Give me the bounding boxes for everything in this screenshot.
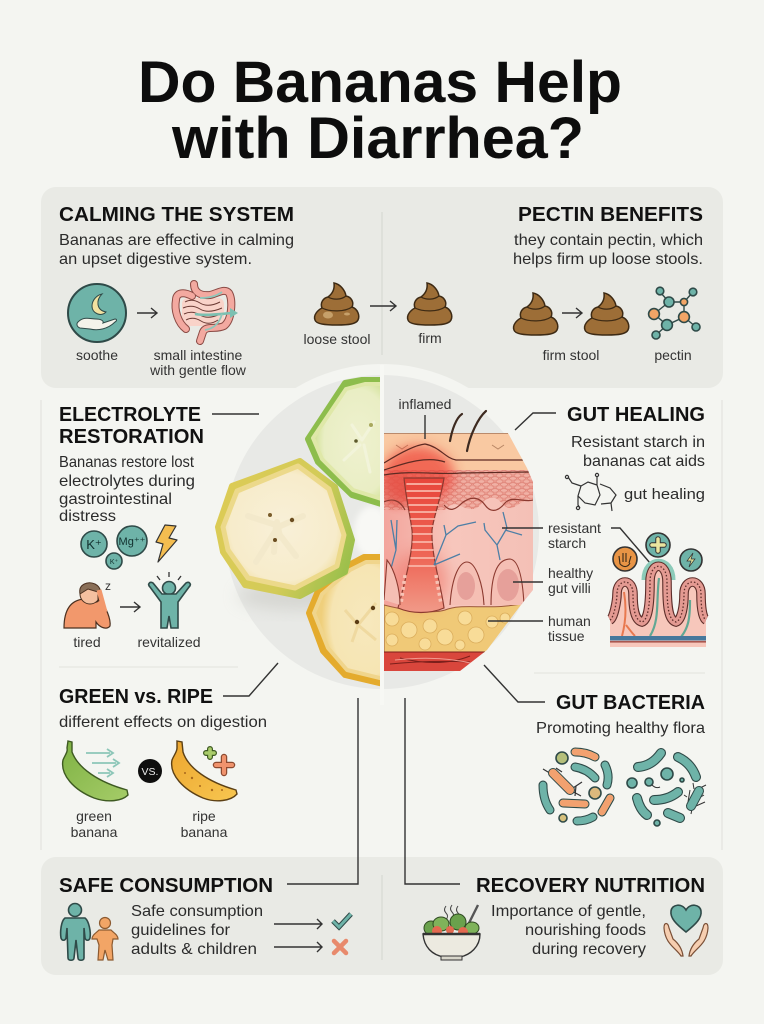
label: firm: firm xyxy=(418,330,442,346)
icon: pectin molecule xyxy=(649,287,700,339)
text: pectin description: they contain pectin, which xyxy=(514,232,703,249)
leader line xyxy=(405,698,460,884)
tissue layer: skin xyxy=(384,433,536,473)
labels: tissue parts: healthy xyxy=(548,565,593,581)
tissue layer: fat xyxy=(384,602,530,652)
tissue folds xyxy=(384,498,533,510)
icon: check mark xyxy=(333,914,351,927)
text: electrolyte description xyxy=(59,454,195,525)
label: ripe banana: ripe xyxy=(192,808,216,824)
heading: calming the system: CALMING THE SYSTEM xyxy=(59,203,294,226)
labels: tissue parts: resistant xyxy=(548,520,601,536)
leader line xyxy=(515,413,556,430)
icon: loose stool xyxy=(315,283,359,325)
banana slice: green xyxy=(308,380,388,506)
text: gut healing description: bananas cat aids xyxy=(583,453,705,470)
inflamed glow xyxy=(382,446,454,506)
label: tired: tired xyxy=(73,634,101,650)
label: firm stool: firm stool xyxy=(543,347,599,363)
icon: tired person xyxy=(64,579,111,628)
central circle: banana versus gut tissue xyxy=(214,364,550,705)
banana slices xyxy=(218,380,390,685)
label: green banana: green xyxy=(76,808,112,824)
icon: heart in hands xyxy=(664,905,708,956)
section: pectin benefits xyxy=(513,203,703,363)
icon: bacteria left cluster xyxy=(543,752,610,822)
labels: tissue parts xyxy=(548,520,601,644)
text: calming description: an upset digestive system. xyxy=(59,251,252,268)
label: green banana xyxy=(71,808,118,840)
tissue layer: dermis xyxy=(384,495,536,620)
arrow: to cross xyxy=(274,942,322,952)
text: pectin description xyxy=(513,232,703,268)
label: soothe: soothe xyxy=(76,347,118,363)
section: gut healing xyxy=(488,403,706,647)
text: electrolyte description: gastrointestinal xyxy=(59,491,172,508)
text: recovery nutrition description: Importance of gentle, xyxy=(491,903,646,920)
icon: starch molecule xyxy=(565,473,616,511)
heading: gut healing: GUT HEALING xyxy=(567,403,705,426)
label: ripe banana xyxy=(181,808,228,840)
blood vessels xyxy=(390,512,522,572)
leader lines: tissue parts xyxy=(488,528,543,621)
labels: tissue parts: tissue xyxy=(548,628,585,644)
icon: electrolyte ions xyxy=(81,525,177,569)
inflamed column xyxy=(398,478,444,612)
heading: pectin benefits: PECTIN BENEFITS xyxy=(518,203,703,226)
arrow: tired to revitalized xyxy=(120,602,140,612)
labels: tissue parts: gut villi xyxy=(548,580,591,596)
tissue layer: red cell layer xyxy=(384,470,536,510)
icon: tired person: z xyxy=(105,579,111,593)
label: inflamed: inflamed xyxy=(399,396,451,412)
icon: versus badge xyxy=(138,759,162,783)
leader line xyxy=(223,663,278,696)
leader line xyxy=(287,698,358,884)
label: ripe banana: banana xyxy=(181,824,228,840)
icon: firm stool xyxy=(408,283,452,325)
icon: bacteria right cluster xyxy=(627,753,706,826)
title xyxy=(138,50,622,171)
tissue layer: muscle xyxy=(384,652,484,671)
section: green vs ripe xyxy=(59,663,278,840)
section: loose to firm stool xyxy=(304,283,452,347)
hair strands xyxy=(450,411,486,451)
icon: small intestine xyxy=(175,284,238,341)
icon: electrolyte ions: K⁺ xyxy=(86,537,102,552)
label: small intestine: with gentle flow xyxy=(149,362,247,378)
icon: salad bowl xyxy=(423,905,480,960)
labels: tissue parts: human xyxy=(548,613,591,629)
text: pectin description: helps firm up loose stools. xyxy=(513,251,703,268)
heading: green vs ripe: GREEN vs. RIPE xyxy=(59,685,213,708)
panel: top band xyxy=(41,187,723,388)
label: revitalized: revitalized xyxy=(137,634,201,650)
text: gut healing description: Resistant starch in xyxy=(571,434,705,451)
text: safe consumption description: Safe consumption xyxy=(131,903,263,920)
text: recovery nutrition description: during recovery xyxy=(532,941,646,958)
icon: check mark fill xyxy=(333,914,351,927)
icon: electrolyte ions: Mg⁺⁺ xyxy=(119,536,146,548)
text: electrolyte description: electrolytes during xyxy=(59,473,195,490)
text: safe consumption description xyxy=(131,903,263,958)
label: gut healing: gut healing xyxy=(624,486,705,503)
heading: gut bacteria: GUT BACTERIA xyxy=(556,691,705,714)
heading: safe consumption: SAFE CONSUMPTION xyxy=(59,874,273,897)
icon: revitalized person xyxy=(149,572,190,628)
leader line xyxy=(212,413,259,415)
heading: recovery nutrition: RECOVERY NUTRITION xyxy=(476,874,705,897)
label: small intestine xyxy=(149,347,247,378)
section: electrolyte restoration xyxy=(59,403,259,650)
icon: firm stool after xyxy=(585,293,629,335)
icon: cross mark xyxy=(334,941,346,953)
icon: versus badge: VS. xyxy=(142,766,158,778)
text: safe consumption description: adults & children xyxy=(131,941,257,958)
section: gut bacteria xyxy=(484,665,706,826)
text: calming description: Bananas are effective in calming xyxy=(59,232,294,249)
icon: electrolyte ions: K⁺ xyxy=(110,559,118,566)
label: loose stool: loose stool xyxy=(304,331,370,347)
leader line xyxy=(484,665,545,702)
icon: healthy villi illustration xyxy=(610,533,706,647)
section: safe consumption xyxy=(59,698,358,960)
title: with Diarrhea? xyxy=(171,106,584,171)
section: recovery nutrition xyxy=(405,698,708,960)
heading: electrolyte restoration: RESTORATION xyxy=(59,425,204,448)
icon: soothing moon and hand xyxy=(68,284,126,342)
arrow: loose to firm xyxy=(370,301,396,311)
heading: electrolyte restoration: ELECTROLYTE xyxy=(59,403,201,426)
heading: electrolyte restoration xyxy=(59,403,204,448)
text: electrolyte description: distress xyxy=(59,508,116,525)
arrow: soothe to intestine xyxy=(137,308,157,318)
text: recovery nutrition description: nourishing foods xyxy=(525,922,646,939)
gut tissue cross-section xyxy=(381,433,536,671)
icon: adult and child xyxy=(61,904,118,960)
label: green banana: banana xyxy=(71,824,118,840)
divider: centre xyxy=(380,365,384,705)
panel: bottom band xyxy=(41,857,723,975)
icon: firm stool before xyxy=(514,293,558,335)
middle frame side lines xyxy=(41,400,722,850)
text: green vs ripe description: different effects on digestion xyxy=(59,714,267,731)
banana slice: ripe yellow xyxy=(309,557,388,685)
labels: tissue parts: starch xyxy=(548,535,586,551)
text: safe consumption description: guidelines for xyxy=(131,922,231,939)
text: gut bacteria description: Promoting healthy flora xyxy=(536,720,705,737)
arrow: to check xyxy=(274,919,322,929)
text: recovery nutrition description xyxy=(491,903,646,958)
label: pectin: pectin xyxy=(654,347,692,363)
skin lines xyxy=(384,444,530,475)
arrow: stool to stool xyxy=(562,308,582,318)
text: electrolyte description: Bananas restore lost xyxy=(59,454,195,471)
icon: green banana xyxy=(63,741,128,801)
text: calming description xyxy=(59,232,294,268)
title: Do Bananas Help xyxy=(138,50,622,115)
section: calming the system xyxy=(59,203,294,378)
text: gut healing description xyxy=(571,434,705,470)
banana slice: main pale xyxy=(218,461,352,596)
label: small intestine: small intestine xyxy=(154,347,243,363)
villi in tissue xyxy=(384,559,524,605)
icon: ripe banana xyxy=(172,741,237,801)
